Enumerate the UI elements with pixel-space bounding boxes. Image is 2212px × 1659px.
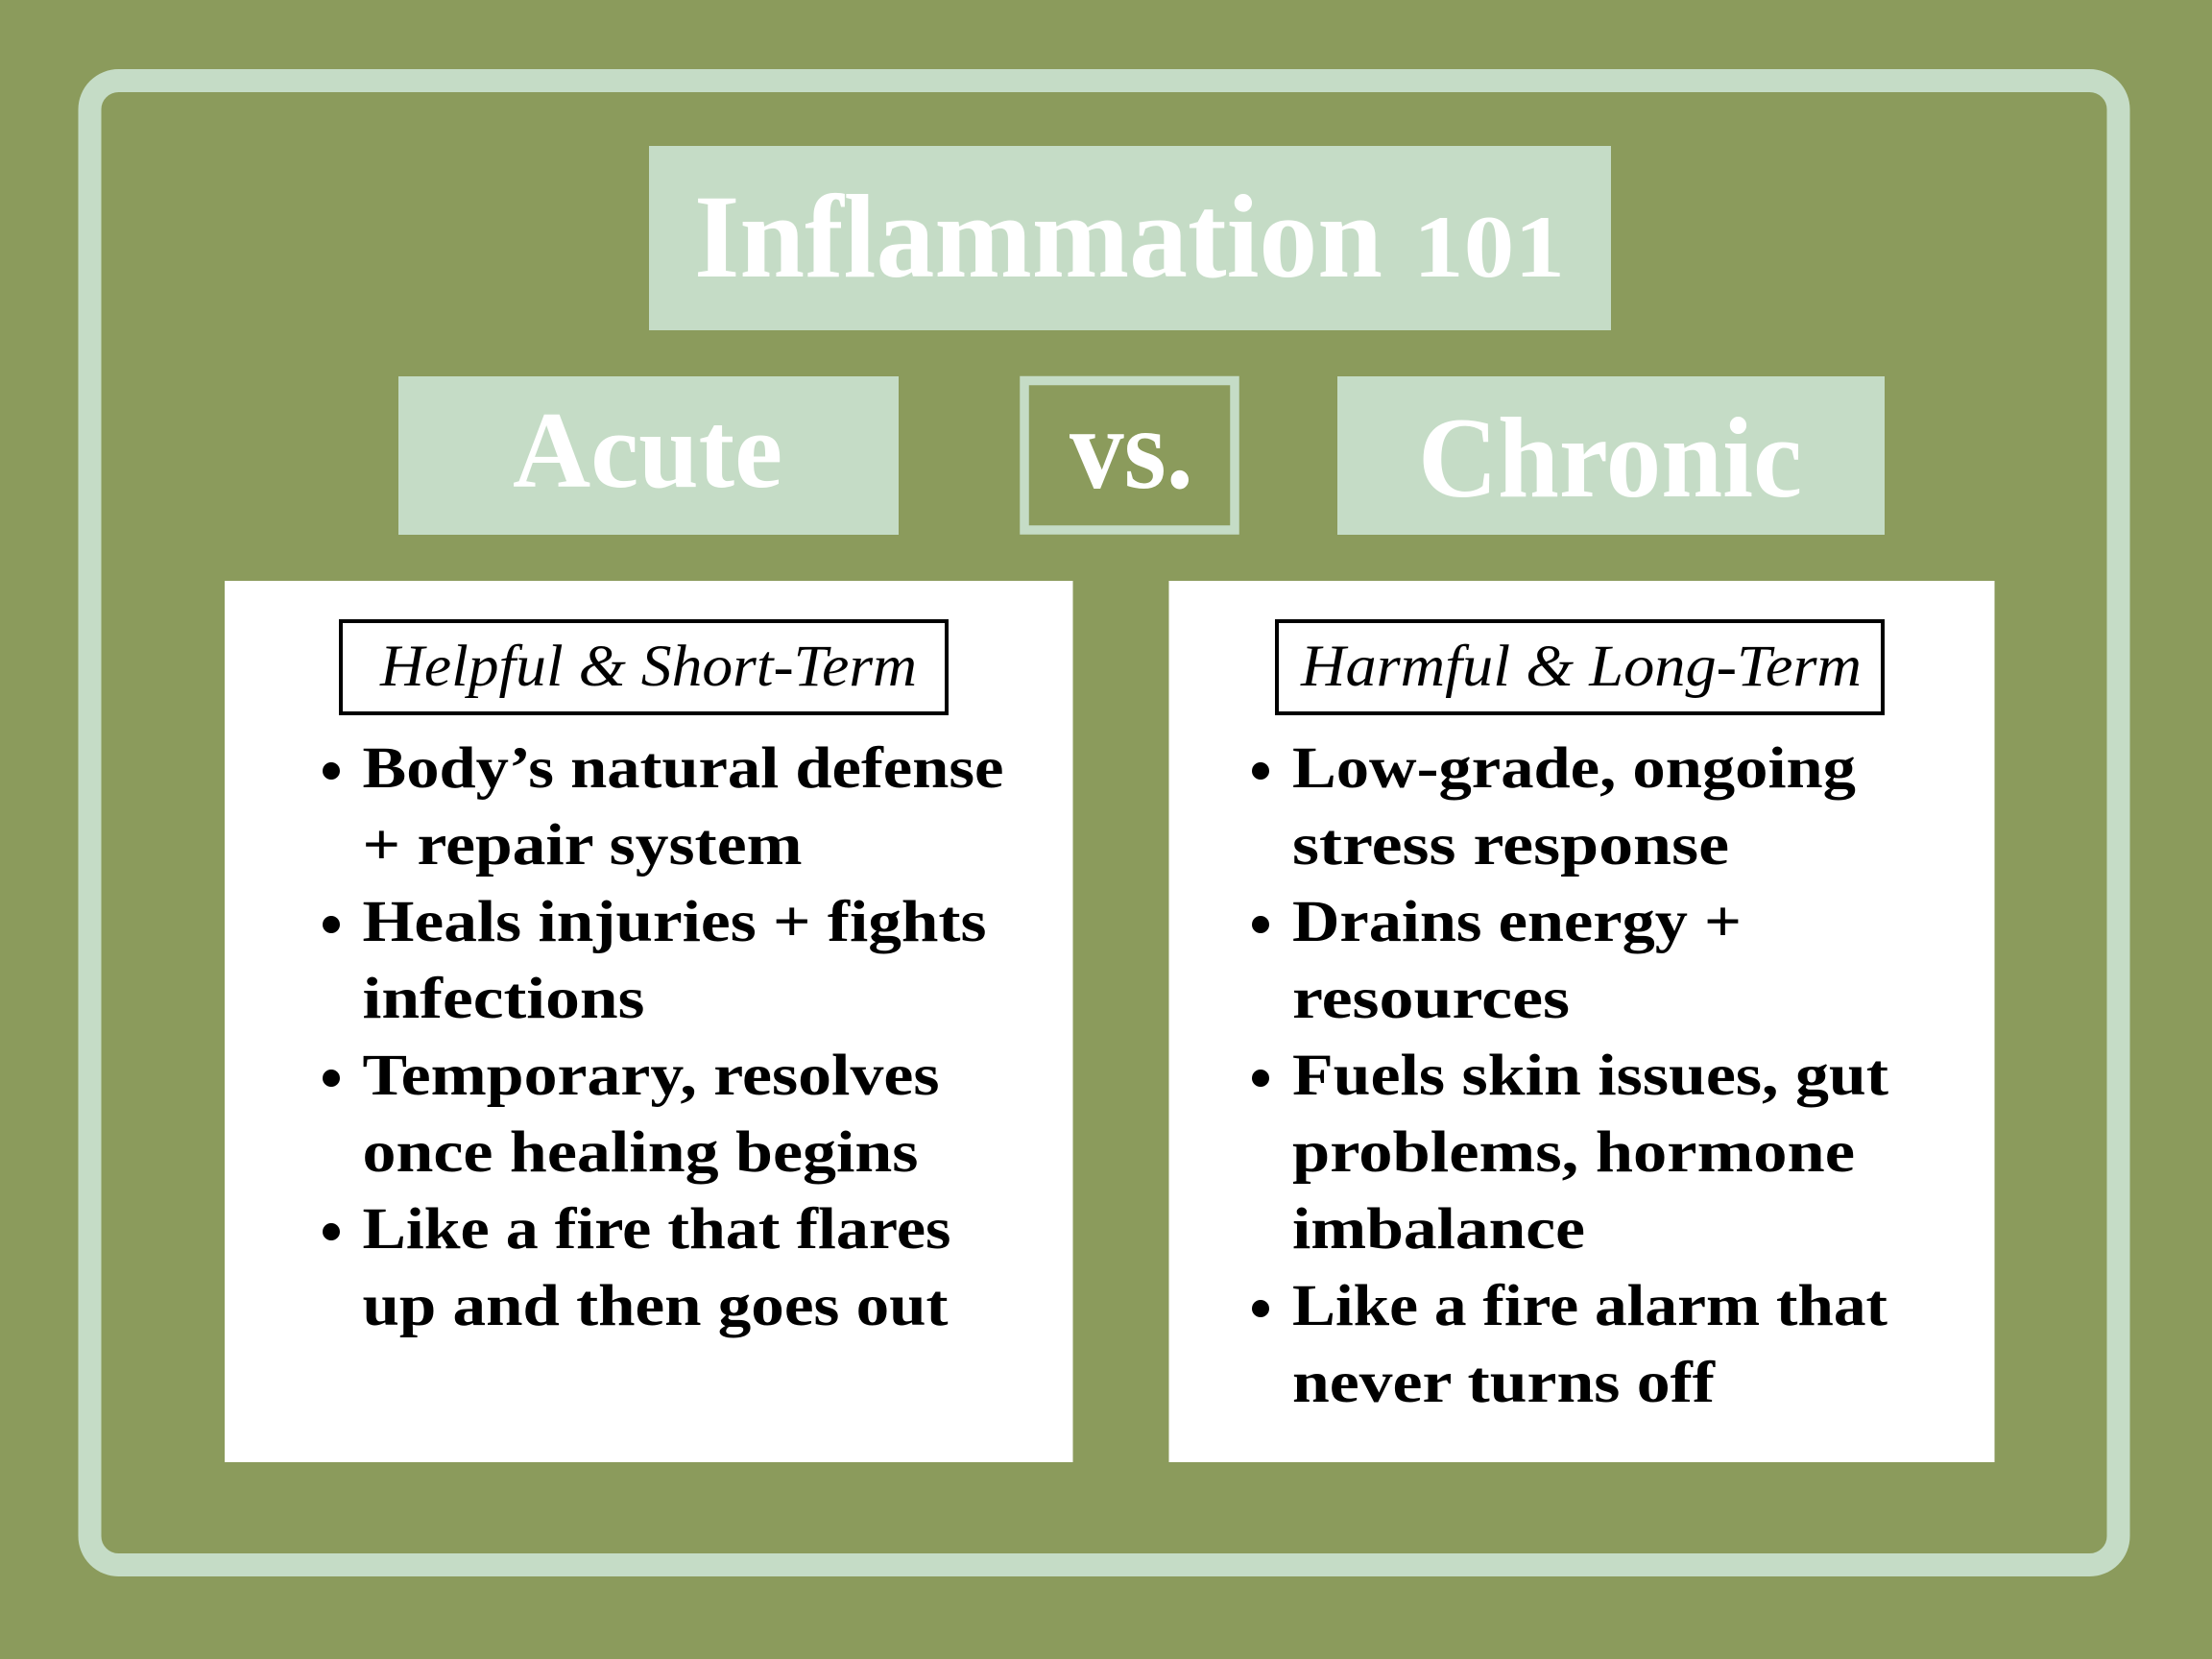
acute bullet list — [323, 736, 1004, 1338]
acute bullet list: Like a fire that flares — [363, 1197, 950, 1262]
tag: helpful and short-term — [341, 621, 947, 713]
chronic bullet list: Fuels skin issues, gut — [1292, 1044, 1889, 1108]
chronic bullet list: stress response — [1292, 813, 1729, 878]
chronic bullet list: problems, hormone — [1292, 1120, 1855, 1185]
panel: acute — [225, 581, 1073, 1462]
chronic bullet list: resources — [1292, 967, 1570, 1031]
acute bullet list: up and then goes out — [363, 1274, 949, 1338]
acute bullet list: Heals injuries + fights — [363, 890, 987, 954]
vs badge — [1024, 380, 1235, 530]
acute bullet list: infections — [363, 967, 645, 1031]
chronic bullet list — [1252, 736, 1889, 1415]
tag: harmful and long-term — [1277, 621, 1883, 713]
acute bullet list: once healing begins — [363, 1120, 918, 1185]
chronic bullet list: Drains energy + — [1292, 890, 1742, 954]
panel: chronic — [1169, 581, 1995, 1462]
heading: chronic — [1337, 376, 1885, 535]
tag: helpful and short-term: Helpful & Short-Term — [379, 635, 917, 699]
acute bullet list: + repair system — [363, 813, 803, 878]
title — [649, 146, 1611, 330]
tag: harmful and long-term: Harmful & Long-Term — [1300, 635, 1862, 699]
acute bullet list: Body’s natural defense — [363, 736, 1004, 801]
chronic bullet list: never turns off — [1292, 1351, 1716, 1415]
vs badge: vs. — [1070, 385, 1193, 514]
heading: acute — [398, 376, 899, 535]
chronic bullet list: Low-grade, ongoing — [1292, 736, 1856, 801]
title: 101 — [1413, 198, 1565, 296]
title: Inflammation — [694, 171, 1382, 302]
chronic bullet list: Like a fire alarm that — [1292, 1274, 1888, 1338]
chronic bullet list: imbalance — [1292, 1197, 1585, 1262]
acute bullet list: Temporary, resolves — [363, 1044, 939, 1108]
heading: acute: Acute — [513, 391, 782, 511]
heading: chronic: Chronic — [1418, 394, 1802, 521]
